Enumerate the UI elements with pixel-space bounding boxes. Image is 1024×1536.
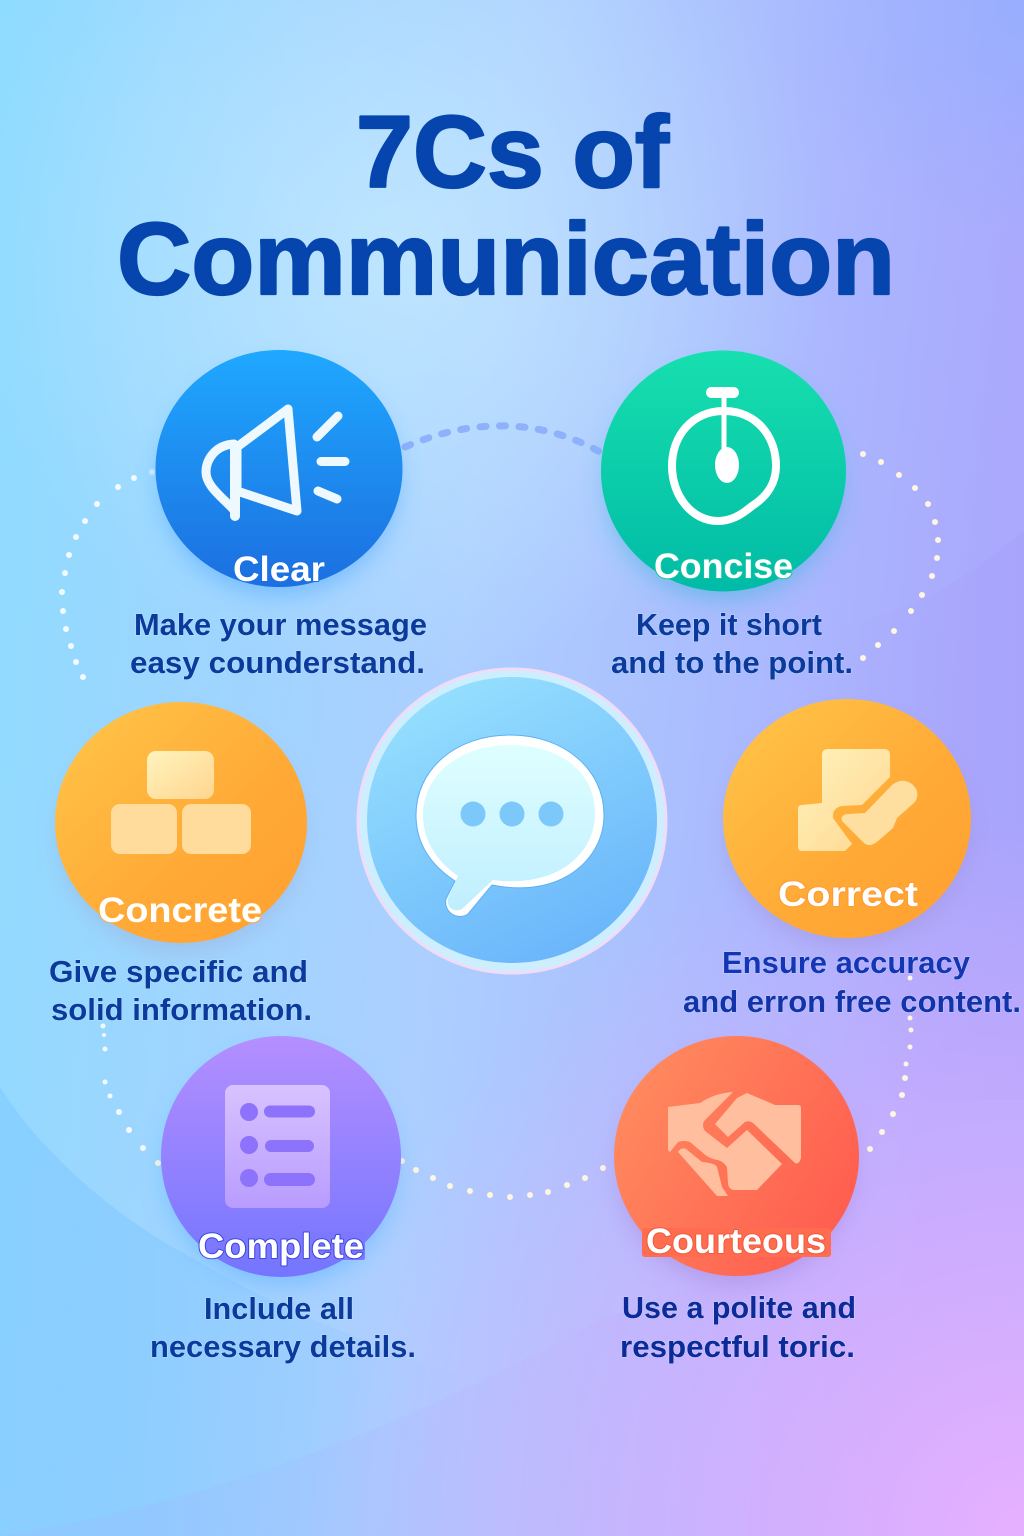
panel: Concise xyxy=(601,350,853,680)
description: Correct: Ensure accuracy xyxy=(722,945,971,980)
description: Concrete: solid information. xyxy=(51,992,312,1027)
description: Complete: Include all xyxy=(204,1291,354,1326)
icon: speech bubble xyxy=(416,735,604,916)
description: Clear: easy counderstand. xyxy=(130,645,425,680)
label: Correct: Correct xyxy=(778,875,918,914)
label: Concise: Concise xyxy=(654,547,793,586)
center speech bubble circle xyxy=(358,669,666,973)
description: Concrete xyxy=(49,954,312,1027)
panel: Concrete xyxy=(49,702,312,1027)
description: Correct xyxy=(683,945,1021,1019)
description: Courteous: Use a polite and xyxy=(622,1290,856,1325)
label: Courteous: Courteous xyxy=(646,1222,826,1261)
description: Concise xyxy=(611,607,853,680)
panel: Courteous xyxy=(614,1036,859,1364)
description: Correct: and erron free content. xyxy=(683,984,1021,1019)
description: Clear xyxy=(130,607,427,680)
panel: Correct xyxy=(683,699,1021,1019)
label: Concrete: Concrete xyxy=(98,891,262,930)
description: Courteous xyxy=(620,1290,856,1364)
title xyxy=(117,95,895,316)
description: Complete xyxy=(150,1291,416,1364)
title: 7Cs of xyxy=(356,95,670,209)
description: Complete: necessary details. xyxy=(150,1329,416,1364)
description: Concrete: Give specific and xyxy=(49,954,308,989)
panel: Complete xyxy=(150,1036,416,1364)
icon: stacked blocks xyxy=(111,751,251,854)
icon: document and check xyxy=(798,749,917,851)
label: Complete: Complete xyxy=(198,1227,364,1266)
title: Communication xyxy=(117,202,895,316)
description: Concise: Keep it short xyxy=(636,607,822,642)
label: Clear: Clear xyxy=(233,550,325,589)
icon: stopwatch xyxy=(672,387,776,521)
icon: handshake xyxy=(668,1092,801,1196)
icon: checklist document xyxy=(225,1085,330,1208)
description: Concise: and to the point. xyxy=(611,645,853,680)
description: Clear: Make your message xyxy=(134,607,427,642)
dotted connector ring xyxy=(59,426,941,1200)
panel: Clear xyxy=(130,350,427,680)
description: Courteous: respectful toric. xyxy=(620,1329,855,1364)
icon: megaphone xyxy=(206,409,345,516)
